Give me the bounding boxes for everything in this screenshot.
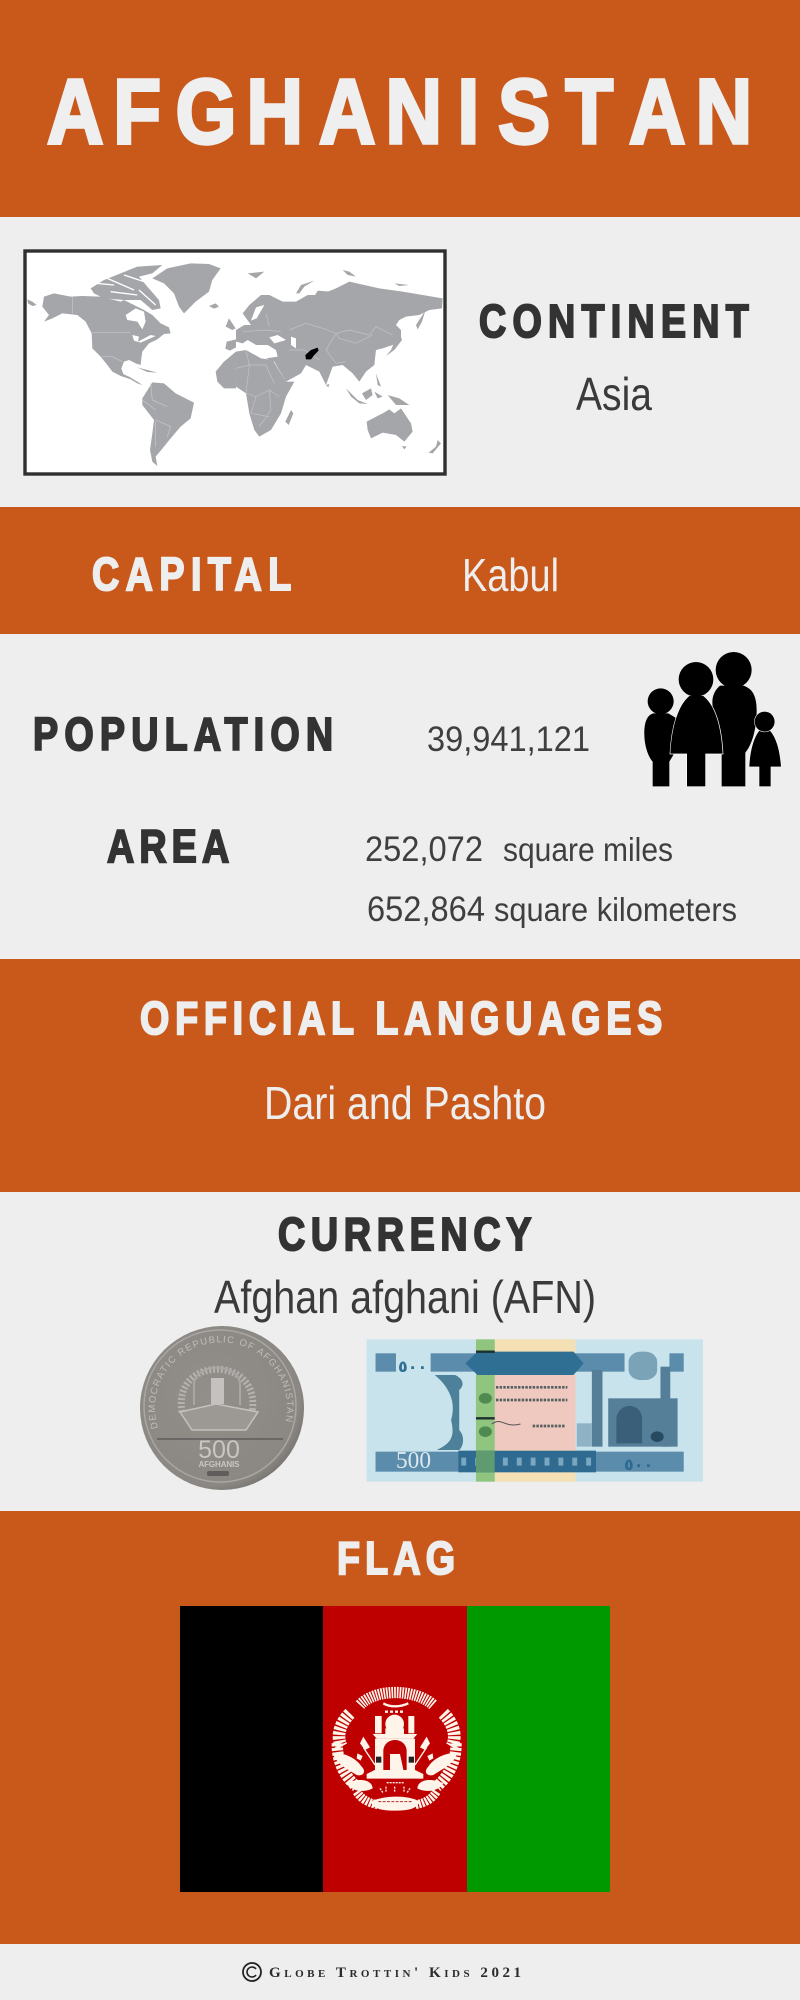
flag of Afghanistan — [180, 1606, 610, 1892]
panel: continent — [25, 251, 749, 474]
panel: official languages — [0, 959, 800, 1192]
icon: 500 afghani coin: DEMOCRATIC REPUBLIC OF AFGHANISTAN — [148, 1336, 294, 1429]
panel: population and area — [33, 652, 781, 929]
languages value: Dari and Pashto — [264, 1077, 546, 1129]
area in square miles — [365, 830, 673, 869]
area heading: AREA — [107, 820, 229, 872]
population heading: POPULATION — [33, 708, 333, 760]
area in square kilometers: square kilometers — [494, 891, 737, 928]
area in square kilometers: 652,864 — [367, 890, 485, 929]
area in square miles: square miles — [503, 831, 673, 868]
icon: 500 afghani coin — [140, 1326, 304, 1490]
area in square kilometers — [367, 890, 737, 929]
panel: currency — [140, 1208, 703, 1490]
icon: copyright — [243, 1963, 261, 1981]
icon: 500 afghani coin: AFGHANIS — [198, 1460, 240, 1469]
capital heading: CAPITAL — [92, 548, 291, 600]
title: AFGHANISTAN — [47, 61, 752, 163]
currency value: Afghan afghani (AFN) — [214, 1271, 596, 1323]
continent value: Asia — [576, 368, 652, 420]
icon: 500 afghani banknote: 500 — [396, 1448, 431, 1474]
credit text: Globe Trottin' Kids 2021 — [269, 1965, 521, 1981]
panel: capital — [0, 507, 800, 634]
continent heading: CONTINENT — [479, 295, 749, 347]
population value: 39,941,121 — [427, 720, 590, 759]
footer credit — [243, 1963, 521, 1981]
panel: flag — [0, 1511, 800, 1944]
area in square miles: 252,072 — [365, 830, 483, 869]
icon: 500 afghani banknote: ٥٠٠ — [398, 1357, 427, 1376]
capital value: Kabul — [462, 549, 559, 601]
languages heading: OFFICIAL LANGUAGES — [140, 992, 662, 1044]
world map locating Afghanistan — [25, 251, 445, 474]
icon: 500 afghani banknote: ٥٠٠ — [624, 1455, 653, 1474]
title banner — [0, 0, 800, 217]
currency heading: CURRENCY — [278, 1208, 531, 1260]
icon: family — [644, 652, 781, 786]
icon: 500 afghani coin: 500 — [198, 1436, 240, 1464]
flag heading: FLAG — [337, 1532, 455, 1584]
national emblem — [333, 1692, 457, 1811]
icon: 500 afghani banknote — [367, 1339, 703, 1482]
